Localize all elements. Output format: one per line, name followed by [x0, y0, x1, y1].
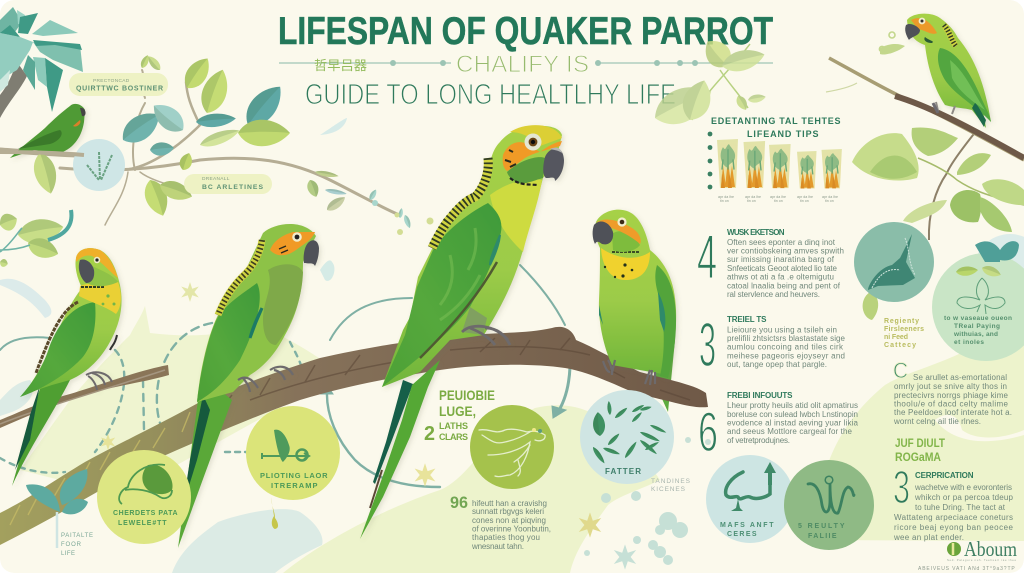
subtitle rule: [279, 60, 773, 66]
small green parrot: [10, 104, 86, 158]
tip 96: cones non at piqving: [472, 516, 546, 525]
tip 6: of vetretprodujnes.: [727, 436, 790, 445]
feet: [238, 367, 293, 392]
tip 3: 3: [699, 311, 716, 380]
upper-right branch and leaves: [852, 127, 1024, 320]
parrot 3: [593, 210, 676, 378]
label: regienty: Regienty: [884, 318, 919, 325]
top-right parrot: [905, 14, 991, 128]
right heading: support program: ROGaMA: [895, 450, 941, 464]
tip 3: Lieioure you using a tsileh ein: [727, 326, 837, 334]
branch: left perch: [0, 365, 169, 428]
background wash: lower right green blob: [819, 320, 1024, 541]
icon circle: 5 reulty falie: FALIIE: [808, 533, 837, 540]
subtitle: CHALIFY IS: [456, 51, 589, 78]
glass captions: apr da lhe: [822, 195, 838, 199]
decorative dashed flight paths: [0, 265, 570, 487]
icon circle: 5 reulty falie: 5 REULTY: [798, 523, 845, 530]
label: tandines kicenes: [651, 478, 691, 493]
wing: [197, 283, 260, 402]
right text: emotional note: thoolu/e of dacd celty malime: [894, 400, 1009, 408]
icon circle: flower: et inoles: [954, 339, 984, 346]
right text: emotional note: [893, 358, 1012, 426]
label: paitalte foor life: FOOR: [61, 542, 82, 548]
glass charts: [717, 139, 738, 188]
icon circle: olive bird drawing: [470, 405, 554, 489]
tip 96: [450, 493, 551, 551]
foot: [462, 326, 510, 345]
tip 4: 4: [697, 223, 717, 292]
tail: [178, 390, 232, 548]
beak: [304, 240, 319, 266]
branch: top left perch overlay: [0, 152, 84, 155]
glass captions: tin on: [825, 199, 834, 203]
face: [76, 248, 118, 278]
tip 3: certification: [893, 461, 1014, 542]
chest spots: [604, 263, 633, 278]
tip 96: of overinne Yoonbutin,: [472, 524, 551, 534]
icon circle: cherdets pata: [97, 450, 191, 544]
tip 4: catoal lnaalia being and pent of: [727, 282, 841, 290]
title: LIFESPAN OF QUAKER PARROT: [278, 10, 773, 53]
right panel: care tips chart: [708, 116, 842, 203]
glass captions: apr da lhe: [770, 195, 786, 199]
guide line: GUIDE TO LONG HEALTLHY LIFE: [305, 79, 676, 111]
label: paitalte foor life: PAITALTE: [61, 533, 93, 539]
glass captions: apr da lhe: [718, 195, 734, 199]
logo: [918, 537, 1017, 572]
right text: emotional note: the Peeldoes loof interate hot a.: [894, 408, 1012, 417]
icon circle: cherdets pata: CHERDETS PATA: [113, 510, 178, 517]
icon: blue sprig circle: [73, 139, 125, 191]
body: [22, 248, 122, 395]
icon circle: 5 reulty falie: [784, 460, 874, 550]
wing: [382, 203, 501, 387]
tip 4: Snfeeticats Geoot aloted lio tate: [727, 264, 838, 273]
breast shading: [263, 264, 303, 345]
right text: emotional note: omrly jout se snive alty thos in: [894, 382, 1007, 391]
tip 4: WUSK EKETSON: [727, 228, 785, 237]
main parrot: [360, 125, 564, 539]
centre text: peuiobie luge: PEUIOBIE: [439, 387, 495, 403]
tip 3: out, tange opep that pargle.: [727, 360, 827, 369]
tip 3: certification: wachetve with e evoronteris: [914, 483, 1012, 492]
foot: [86, 372, 112, 390]
centre text: peuiobie luge: 2: [424, 423, 435, 445]
orange mask: [270, 232, 315, 255]
tip 3: meihese pageoris ejoyseyr and: [727, 352, 845, 360]
tip 3: certification: ricore beaj eyong ban peocee: [894, 523, 1014, 532]
right heading: support program: JUF DIULT: [895, 436, 946, 450]
glass captions: tin on: [800, 199, 809, 203]
icon: small sprig top right: [879, 32, 905, 55]
right text: emotional note: C: [893, 358, 908, 383]
glass captions: [718, 195, 838, 203]
palm trunk: [0, 62, 27, 118]
body: [595, 210, 676, 375]
body: [382, 126, 562, 387]
bullet dots: [708, 132, 712, 189]
glass captions: tin on: [720, 199, 729, 203]
background wash: blue pool: [172, 509, 323, 573]
branch: main perch: [0, 327, 708, 545]
label: regienty: [884, 318, 924, 349]
tip 4: Often sees eponter a dinq inot: [727, 238, 836, 247]
tip 6: 6: [698, 400, 718, 463]
top-left vine branches: [0, 70, 400, 225]
tip 96: thapaties thog you: [472, 533, 540, 542]
icon: teal leaves: [26, 469, 88, 548]
title block: [278, 10, 773, 111]
tip 3: prelifili zhtsictsrs blastastate sige: [727, 334, 846, 343]
tip 4: [697, 223, 844, 299]
tail feathers dark: [373, 380, 413, 484]
foliage: [852, 133, 919, 181]
tip 6: evodence al instad aeving yuar likia: [727, 418, 859, 428]
tip 96: wnesnaut tahn.: [471, 542, 524, 551]
stem: [929, 130, 977, 240]
icon circle: fatter: FATTER: [605, 467, 641, 476]
orange mask: [503, 141, 562, 171]
logo: Sed. Palegore nuh. Teehuarl rae thee: [947, 558, 1016, 562]
label: tandines kicenes: KICENES: [651, 486, 686, 493]
tail: [360, 360, 440, 539]
green cheek: [612, 231, 640, 252]
heading: EDETANTING TAL TEHTES: [711, 116, 841, 126]
glass captions: tin on: [774, 199, 783, 203]
tip 3: certification: whikch or pa percoa tdeup: [914, 493, 1014, 502]
chest: [601, 248, 650, 280]
yellow chest: [490, 179, 542, 252]
background wash: pale blue left: [0, 380, 33, 416]
right heading: support program: [895, 436, 946, 464]
tip 4: ral stervlence and heuvers.: [727, 290, 820, 299]
leg feathers: [462, 307, 487, 335]
tip 6: [698, 391, 859, 463]
chest: [79, 282, 121, 314]
tip 3: certification: Wattateng arpeciaace coneturs: [894, 513, 1013, 522]
centre text: peuiobie luge: LATHS: [439, 421, 468, 431]
icon circle: flower: withuias, and: [953, 331, 998, 338]
mask: [597, 220, 641, 244]
tip 96: sunnatt rbgvgs keleri: [472, 507, 544, 516]
logo: ABEIVEUS VATI ANd 3T°9a3?TP: [918, 566, 1015, 572]
parrot 3 tail behind branch: [650, 340, 675, 412]
tip 3: certification: wee an plat ender.: [893, 533, 964, 542]
tip 96: hifeutt han a cravishg: [472, 499, 547, 508]
icon circle: maps and ceres: [706, 455, 794, 543]
crown: [510, 125, 562, 146]
neck pattern: [432, 158, 488, 248]
tip 3: TREIEL TS: [727, 315, 767, 324]
icon circle: plioting lagor: PLIOTING LAOR: [260, 471, 328, 480]
beak: [543, 148, 564, 181]
tip 3: certification: CERPRICATION: [915, 471, 974, 480]
icon circle: fatter: [580, 390, 674, 484]
tip 4: ver contiobskeing amves spwith: [727, 246, 844, 256]
label: bc arletines: DREANALL: [202, 176, 230, 182]
glass captions: apr da lhe: [797, 195, 813, 199]
label: quirttwc bostiner: QUIRTTWC BOSTINER: [76, 86, 163, 92]
background wash: lower centre green blob: [283, 405, 660, 573]
label: quirttwc bostiner: [69, 73, 168, 96]
centre text: peuiobie luge: [424, 387, 495, 445]
label: paitalte foor life: LIFE: [61, 551, 75, 557]
icon circle: plioting lagor: [246, 406, 340, 529]
tip 6: FREBI INFOUUTS: [727, 391, 793, 400]
centre text: peuiobie luge: LUGE,: [439, 403, 476, 419]
label: regienty: Firsleeners: [884, 326, 924, 333]
right text: emotional note: prectecivrs norrgs phiage kime: [894, 391, 1009, 400]
label: bc arletines: [184, 174, 272, 194]
icon circle: plioting lagor: ITRERAMP: [271, 481, 318, 490]
tip 96: 96: [450, 493, 468, 512]
tip 6: and seeus Mottlore cargeal for the: [727, 427, 853, 436]
icon circle: cherdets pata: LEWELE#TT: [118, 520, 167, 527]
glass captions: tin on: [747, 199, 756, 203]
tip 6: Lheur protty heuils atid olit apmatirus: [727, 401, 858, 410]
tip 3: [699, 311, 846, 380]
parrot 1: [12, 248, 122, 486]
right text: emotional note: Se arullet as-emortational: [913, 373, 1007, 382]
tail: [12, 365, 70, 486]
tip 3: aumlou concoing and tiles cirk: [727, 342, 844, 352]
subtitle ornament: 哲早吕器: [314, 58, 367, 73]
parrot 3 feet: [603, 360, 655, 385]
top-left palm: [0, 7, 83, 118]
wing: [20, 302, 95, 397]
right text: emotional note: wornt celng ail tlie rlnes.: [893, 417, 981, 426]
label: tandines kicenes: TANDINES: [651, 478, 691, 485]
green throat: [507, 157, 545, 183]
leaves over title: [648, 34, 767, 133]
branch: top right perch: [826, 58, 1024, 160]
icon circle: flower: to w vaseaue oueon: [944, 315, 1012, 322]
icon circle: flower: [932, 234, 1024, 361]
tip 3: certification: to tuhe Dring. The tact at: [915, 503, 1006, 512]
label: paitalte foor life: [61, 533, 93, 557]
label: quirttwc bostiner: PRECTONCAD: [93, 78, 130, 84]
centre text: peuiobie luge: CLARS: [439, 432, 468, 442]
neck pattern: [218, 240, 262, 315]
right panel: care tips chart: LIFEAND TIPS: [747, 129, 819, 139]
parrot 2: [178, 224, 319, 548]
tip 4: athws ot ati a fa .e oltemigutu: [727, 272, 834, 282]
icon circle: maps and ceres: CERES: [727, 531, 757, 538]
right icons: bird circle: [854, 222, 934, 302]
top-left leaves: [0, 53, 433, 268]
palm fronds: [0, 7, 22, 33]
icon circle: flower: TReal Paying: [954, 323, 1000, 330]
background wash: green behind perches: [20, 306, 330, 480]
beak: [593, 221, 613, 244]
tip 4: sur imissing inaratina barg of: [727, 255, 835, 264]
tip 3: certification: 3: [893, 461, 910, 513]
glass captions: apr da lhe: [745, 195, 761, 199]
label: bc arletines: BC ARLETINES: [202, 184, 263, 191]
decorative scatter: pale stars and leaves: [0, 118, 711, 570]
label: regienty: Cattecy: [884, 342, 916, 349]
tip 6: boreluse con sulead lwbch Lnstinopin: [727, 410, 858, 419]
body: [197, 224, 316, 402]
wing: [655, 265, 676, 378]
label: regienty: ni Feed: [884, 334, 908, 341]
icon circle: maps and ceres: MAFS ANFT: [720, 522, 774, 529]
